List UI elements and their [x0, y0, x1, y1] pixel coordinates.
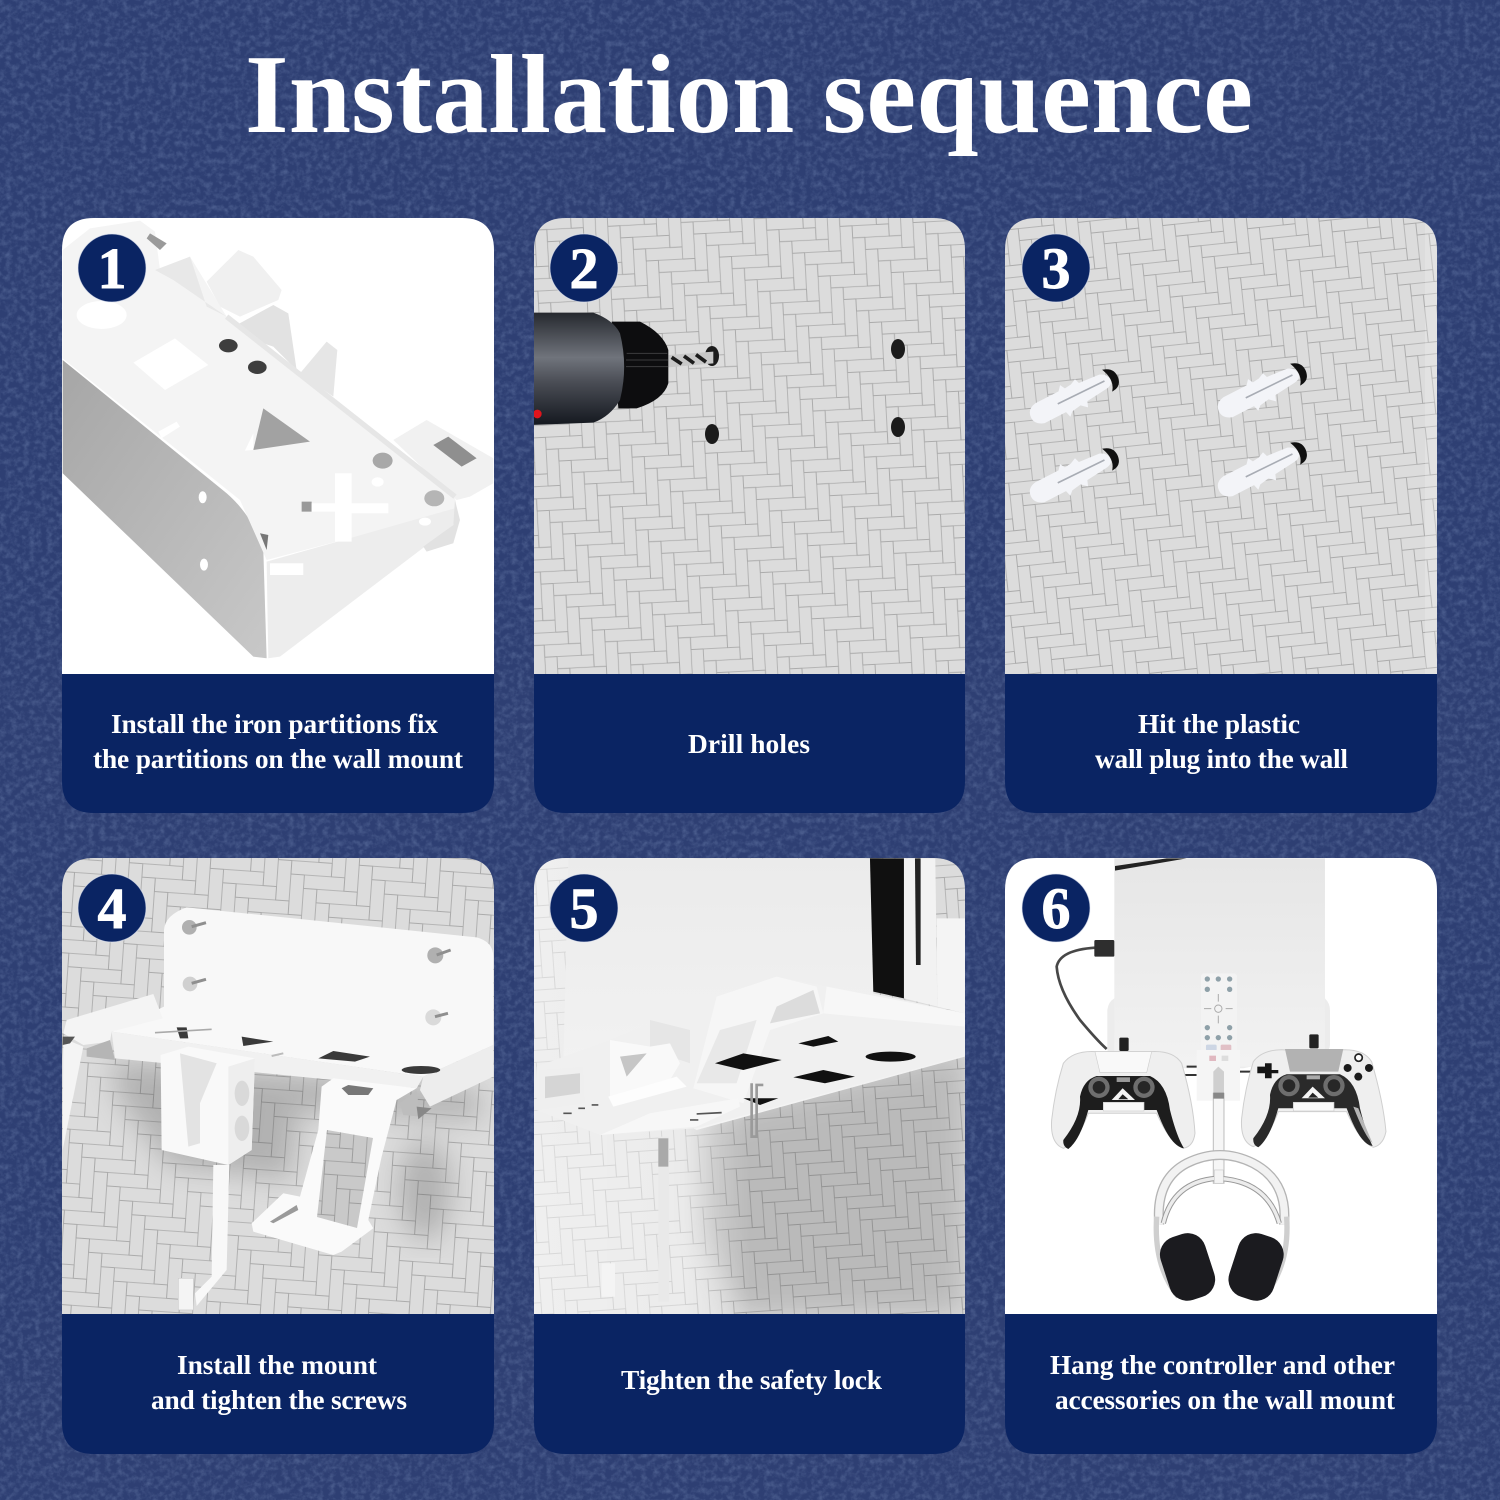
- step 2 number badge: 2: [570, 236, 598, 301]
- step 2 caption: [534, 674, 965, 813]
- title: Installation sequence: [245, 33, 1253, 157]
- panel: step 1: [62, 218, 494, 813]
- step 3 number badge: 3: [1042, 236, 1070, 301]
- step 3 image: plastic wall plugs: [1005, 218, 1437, 674]
- left controller: [1051, 1051, 1195, 1149]
- step 6 number badge: 6: [1042, 876, 1070, 941]
- step 6 caption: Hang the controller and other: [1050, 1350, 1395, 1380]
- step 1 caption: Install the iron partitions fix: [111, 709, 438, 739]
- step 4 caption: Install the mount: [177, 1350, 377, 1380]
- panel: step 4: [62, 858, 494, 1454]
- step 4 caption: [62, 1314, 494, 1454]
- step 1 caption: [62, 674, 494, 813]
- panel: step 2: [530, 218, 965, 813]
- panel: step 6: [1005, 858, 1437, 1454]
- step 3 caption: Hit the plastic: [1138, 709, 1300, 739]
- console and wall plate: [1107, 858, 1330, 1075]
- step 3 caption: wall plug into the wall: [1095, 744, 1348, 774]
- drill: [530, 313, 713, 425]
- step 1 caption: the partitions on the wall mount: [93, 744, 463, 774]
- step 1 number badge: [78, 234, 146, 302]
- panel: step 3: [1005, 218, 1437, 813]
- step 6 image: console with accessories hung on the mount: [1005, 858, 1437, 1314]
- media remote on hook: [1197, 973, 1240, 1101]
- step 2 caption: Drill holes: [688, 729, 810, 759]
- step 4 number badge: [78, 874, 146, 942]
- step 1 image: iron partitions on the mount: [62, 218, 494, 674]
- step 5 image: safety lock under the shelf: [530, 857, 970, 1317]
- step 2 number badge: [550, 234, 618, 302]
- step 5 caption: [534, 1314, 965, 1454]
- step 1 number badge: 1: [98, 236, 126, 301]
- hanging hook strip: [1213, 1093, 1224, 1183]
- headset: [1155, 1155, 1288, 1306]
- right controller: [1241, 1049, 1386, 1147]
- step 5 number badge: [550, 874, 618, 942]
- step 5 caption: Tighten the safety lock: [621, 1365, 883, 1395]
- step 5 number badge: 5: [570, 876, 598, 941]
- step 4 caption: and tighten the screws: [151, 1385, 407, 1415]
- panel: step 5: [530, 857, 970, 1454]
- step 4 image: mount with screws on the wall: [62, 858, 494, 1314]
- step 3 caption: [1005, 674, 1437, 813]
- step 3 number badge: [1022, 234, 1090, 302]
- drill hole markers: [705, 339, 905, 444]
- step 2 image: drilling holes in the wall: [530, 218, 965, 674]
- usb cable: [1057, 940, 1114, 1049]
- step 6 caption: accessories on the wall mount: [1055, 1385, 1395, 1415]
- step 6 caption: [1005, 1314, 1437, 1454]
- step 4 number badge: 4: [98, 876, 126, 941]
- step 6 number badge: [1022, 874, 1090, 942]
- wall plugs: [1030, 363, 1307, 502]
